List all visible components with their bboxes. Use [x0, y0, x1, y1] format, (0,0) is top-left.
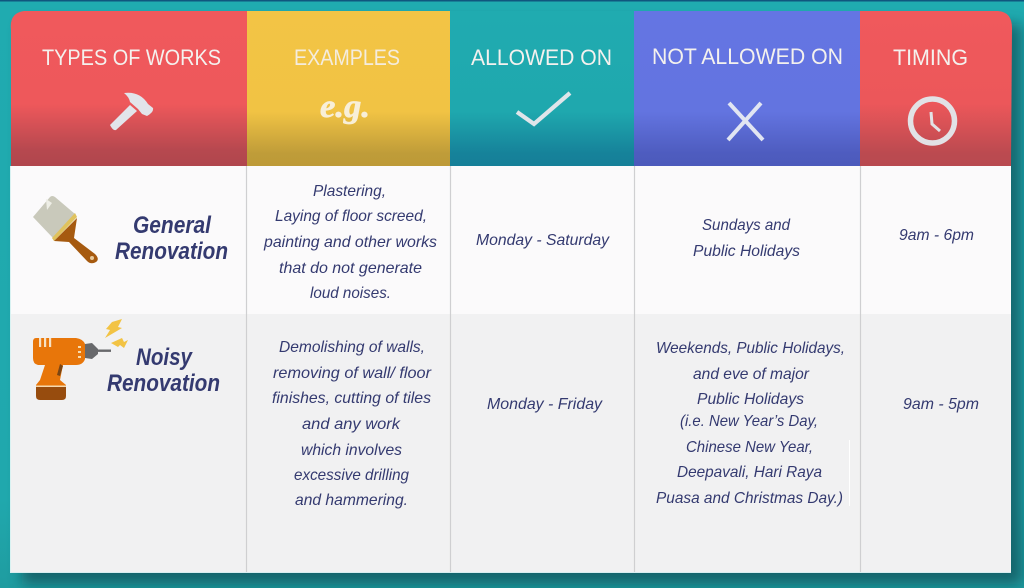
- timing: general renovation: 9am - 6pm: [899, 227, 974, 244]
- icon: power drill: [33, 319, 128, 400]
- row label: general renovation: General: [133, 212, 212, 239]
- examples: noisy renovation: Demolishing of walls,: [279, 339, 425, 356]
- not allowed on: noisy renovation: Weekends, Public Holidays,: [656, 340, 845, 357]
- examples: general renovation: Plastering,: [313, 183, 386, 200]
- examples: noisy renovation: [272, 339, 432, 509]
- examples: general renovation: that do not generate: [279, 260, 422, 277]
- heading: types of works: TYPES OF WORKS: [42, 45, 221, 70]
- examples: noisy renovation: which involves: [301, 442, 402, 459]
- not allowed on: general renovation: Public Holidays: [693, 243, 800, 260]
- timing: noisy renovation: 9am - 5pm: [903, 396, 979, 413]
- header: not allowed on: [634, 11, 860, 166]
- examples: general renovation: painting and other works: [263, 234, 437, 251]
- header: timing: [860, 11, 1012, 166]
- not allowed on: noisy renovation: Puasa and Christmas Day.): [656, 490, 843, 507]
- icon: cross: [728, 103, 763, 140]
- icon: e.g.: e.g.: [320, 89, 370, 125]
- examples: noisy renovation: excessive drilling: [294, 467, 409, 484]
- not allowed on: noisy renovation: [656, 340, 845, 507]
- icon: check mark: [517, 93, 570, 124]
- examples: general renovation: Laying of floor screed,: [275, 208, 427, 225]
- not allowed on: noisy renovation: Public Holidays: [697, 391, 804, 408]
- row label: noisy renovation: Noisy: [136, 344, 193, 371]
- not allowed on: general renovation: [693, 217, 800, 260]
- not allowed on: general renovation: Sundays and: [702, 217, 791, 234]
- row label: general renovation: Renovation: [115, 238, 228, 265]
- row label: noisy renovation: Renovation: [107, 370, 220, 397]
- not allowed on: noisy renovation: Deepavali, Hari Raya: [677, 464, 822, 481]
- examples: noisy renovation: and any work: [302, 416, 401, 433]
- icon: clock: [910, 99, 954, 143]
- not allowed on: noisy renovation: Chinese New Year,: [686, 439, 813, 456]
- not allowed on: noisy renovation: (i.e. New Year’s Day,: [680, 413, 818, 430]
- heading: not allowed on: NOT ALLOWED ON: [652, 44, 843, 69]
- allowed on: noisy renovation: Monday - Friday: [487, 396, 603, 413]
- panel: table body: [10, 166, 1011, 573]
- examples: general renovation: [263, 183, 437, 302]
- heading: timing: TIMING: [893, 45, 968, 70]
- examples: general renovation: loud noises.: [310, 285, 391, 302]
- heading: examples: EXAMPLES: [294, 45, 400, 70]
- not allowed on: noisy renovation: and eve of major: [693, 366, 810, 383]
- header: examples: [247, 11, 450, 166]
- allowed on: general renovation: Monday - Saturday: [476, 232, 610, 249]
- row label: general renovation: [115, 212, 228, 265]
- row label: noisy renovation: [107, 344, 220, 397]
- heading: allowed on: ALLOWED ON: [471, 45, 612, 70]
- header: allowed on: [450, 11, 634, 166]
- header: types of works: [11, 11, 247, 166]
- icon: paint brush: [33, 196, 98, 263]
- icon: hammer: [110, 93, 153, 130]
- examples: noisy renovation: finishes, cutting of tiles: [272, 390, 431, 407]
- examples: noisy renovation: removing of wall/ floor: [273, 365, 432, 382]
- examples: noisy renovation: and hammering.: [295, 492, 408, 509]
